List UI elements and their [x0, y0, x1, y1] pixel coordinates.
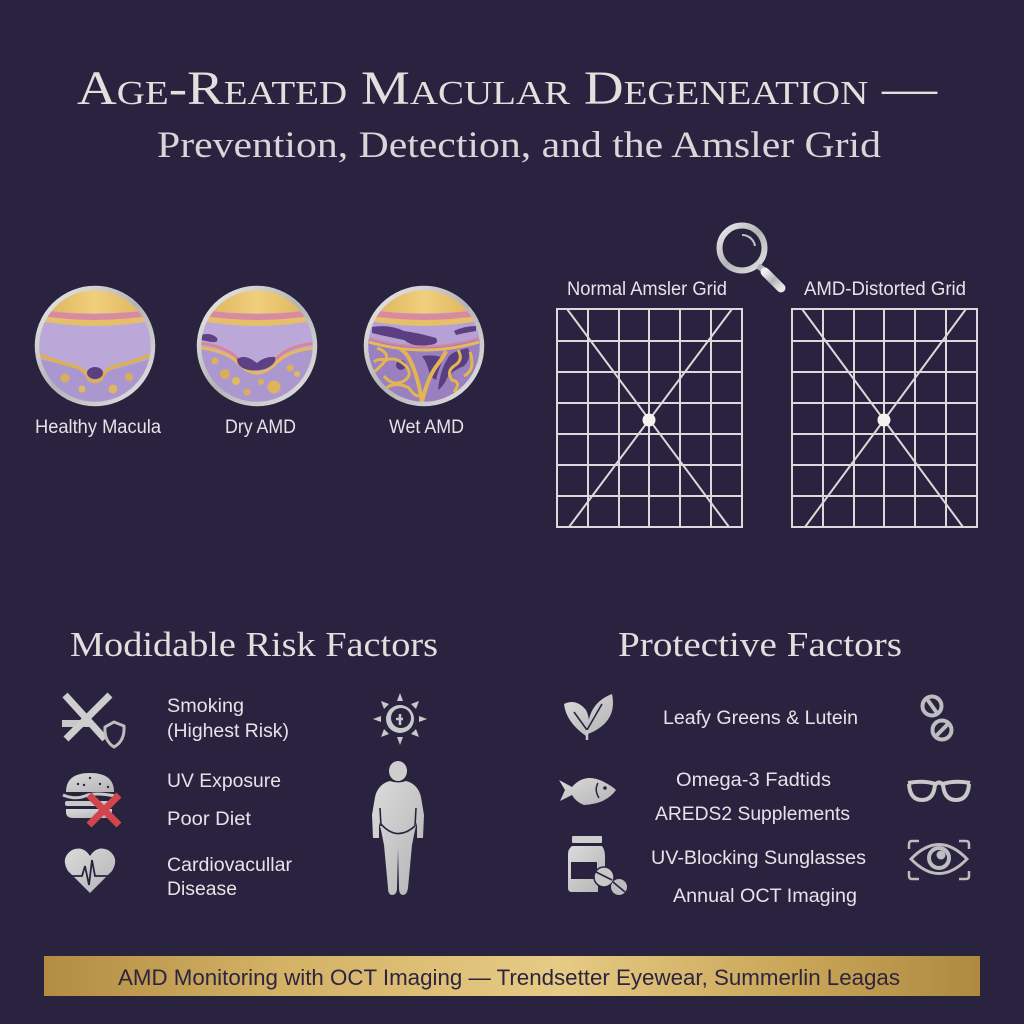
chart: normal Amsler grid: [557, 309, 742, 527]
icon: burger with red cross: [63, 773, 119, 825]
banner: [44, 956, 980, 996]
title: Prevention, Detection, and the Amsler Grid: [157, 125, 882, 166]
text: sunglasses: UV-Blocking Sunglasses: [651, 848, 866, 869]
text: AREDS2: AREDS2 Supplements: [655, 804, 850, 825]
label: dry AMD: Dry AMD: [225, 417, 296, 438]
label: AMD-distorted grid: AMD-Distorted Grid: [804, 279, 966, 300]
heading: protective factors: Protective Factors: [618, 625, 902, 664]
text: smoking: [167, 696, 289, 742]
panel: macula cross-sections: [35, 286, 484, 438]
icon: heart with pulse: [65, 848, 115, 893]
text: OCT imaging: Annual OCT Imaging: [673, 886, 857, 907]
icon: eye scan: [909, 841, 969, 879]
text: leafy greens: Leafy Greens & Lutein: [663, 708, 858, 729]
icon: magnifying glass: [720, 226, 781, 288]
text: smoking: (Highest Risk): [167, 721, 289, 742]
diagram: wet AMD: [364, 286, 484, 406]
icon: fish: [559, 778, 616, 805]
panel: protective factors: [559, 625, 970, 907]
icon: no smoking with shield: [62, 695, 124, 747]
text: cardiovascular disease: Disease: [167, 879, 237, 900]
icon: human body: [372, 761, 424, 895]
label: healthy macula: Healthy Macula: [35, 417, 161, 438]
chart: AMD-distorted grid: [792, 309, 977, 527]
text: cardiovascular disease: [167, 855, 293, 900]
text: smoking: Smoking: [167, 696, 244, 717]
label: normal Amsler grid: Normal Amsler Grid: [567, 279, 727, 300]
text: omega-3: Omega-3 Fadtids: [676, 770, 831, 791]
diagram: dry AMD: [197, 286, 317, 406]
icon: supplement bottle and pills: [568, 836, 627, 895]
heading: risk factors: Modidable Risk Factors: [70, 625, 438, 664]
icon: glasses: [908, 782, 970, 800]
icon: two pills: [922, 696, 952, 740]
text: poor diet: Poor Diet: [167, 809, 252, 830]
text: cardiovascular disease: Cardiovacullar: [167, 855, 293, 876]
label: wet AMD: Wet AMD: [389, 417, 464, 438]
diagram: healthy macula: [35, 286, 155, 406]
title: Age-Reated Macular Degeneation —: [77, 62, 938, 115]
banner: AMD Monitoring with OCT Imaging — Trendsetter Eyewear, Summerlin Leagas: [118, 965, 900, 990]
title: [77, 62, 938, 166]
text: UV exposure: UV Exposure: [167, 771, 281, 792]
icon: sun: [373, 693, 427, 745]
panel: modifiable risk factors: [62, 625, 438, 900]
icon: leaves: [564, 694, 613, 740]
